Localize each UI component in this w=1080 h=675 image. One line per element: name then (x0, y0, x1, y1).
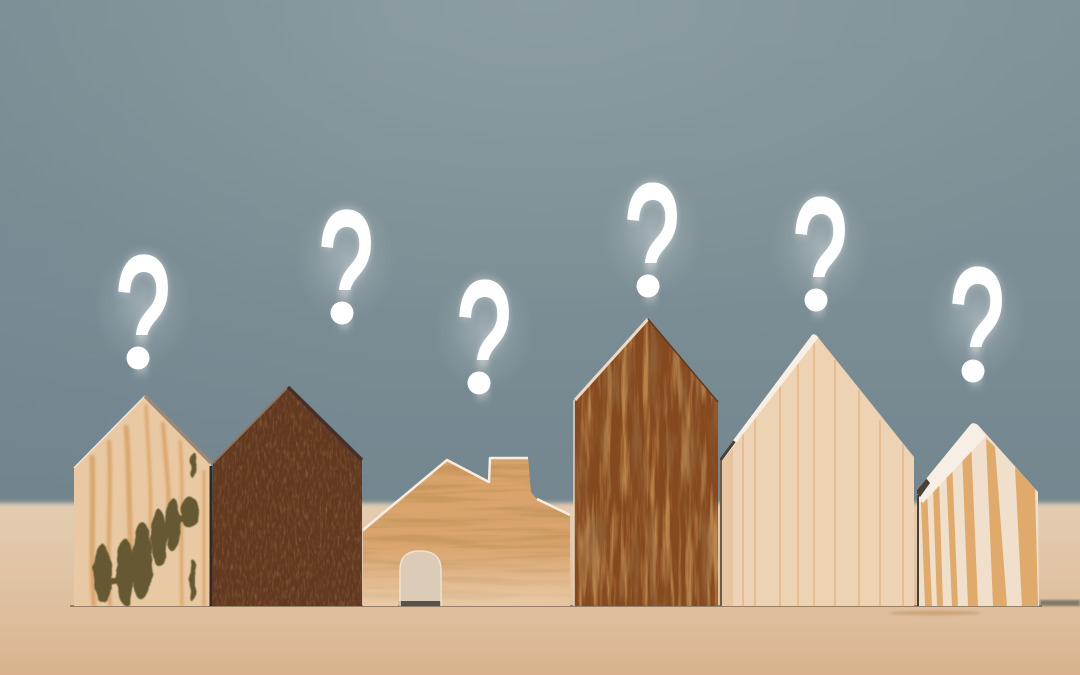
question mark 2 (312, 204, 380, 332)
house 1: pale pine with dark knots (74, 396, 211, 607)
question mark 6 (943, 261, 1011, 390)
question mark 6: ? (950, 236, 1004, 417)
knots (94, 452, 199, 607)
question mark 2: ? (319, 179, 373, 360)
question mark 4 (618, 177, 686, 306)
background wall (0, 0, 1080, 515)
question mark 3: ? (457, 249, 511, 430)
question mark 3: ? (457, 249, 511, 430)
door opening (399, 551, 442, 606)
wooden table surface (0, 503, 1080, 675)
question mark 2: ? (319, 179, 373, 360)
question mark 4: ? (625, 152, 679, 333)
question mark 1: ? (116, 224, 170, 405)
question mark 5: ? (793, 166, 847, 347)
question mark 5: ? (793, 166, 847, 347)
house 6: striped pine (912, 418, 1039, 606)
question mark 1 (109, 249, 178, 378)
question mark 5 (786, 191, 854, 320)
question mark 1: ? (116, 224, 170, 405)
house 5: large pale spruce (716, 332, 914, 606)
question mark 3 (450, 274, 518, 402)
house 4: tall mahogany (574, 318, 718, 606)
question mark 4: ? (625, 152, 679, 333)
question mark 6: ? (950, 236, 1004, 417)
house 2: dark walnut (211, 387, 362, 606)
house 3: beech house with chimney and arched door (363, 457, 570, 606)
